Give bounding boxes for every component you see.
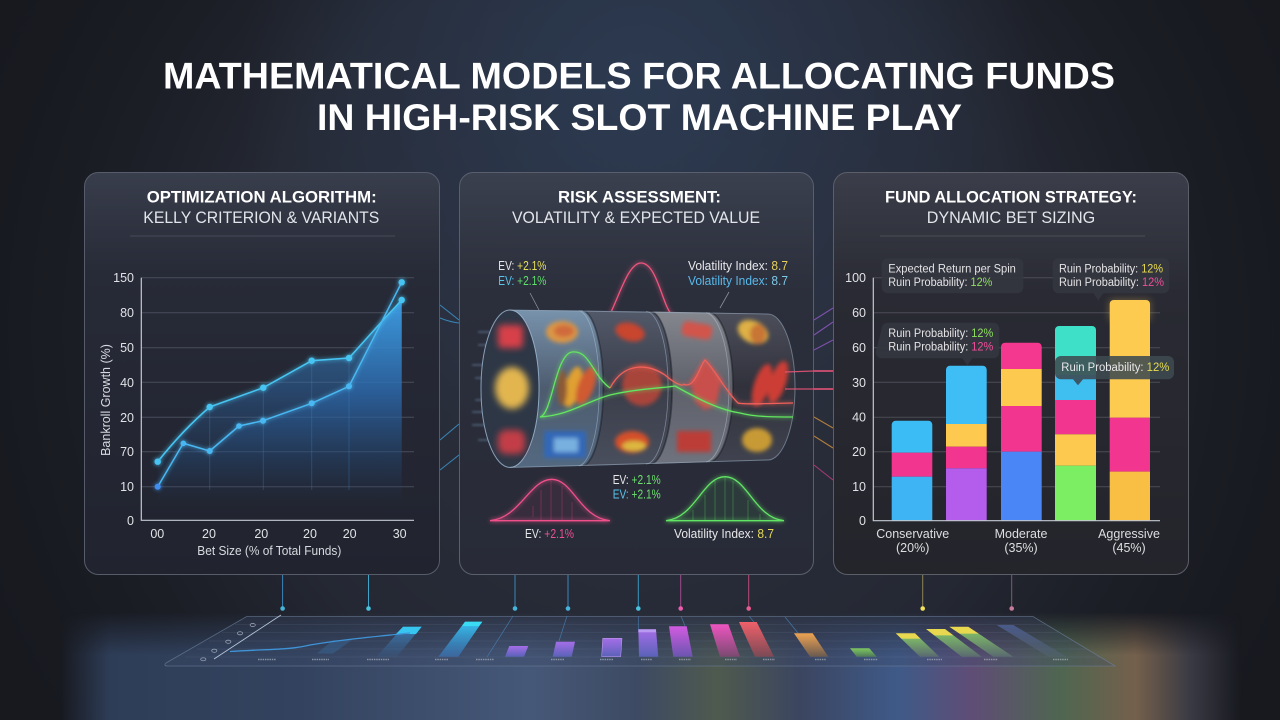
x axis labels: 20 — [254, 527, 268, 541]
axes — [141, 278, 414, 520]
stacked bar chart — [845, 258, 1174, 555]
glowing input stream — [459, 388, 505, 390]
y axis labels: 20 — [852, 445, 866, 459]
reel segment 4 — [710, 312, 795, 462]
y axis labels — [845, 271, 866, 528]
y axis labels: 100 — [845, 271, 866, 285]
line chart: bankroll growth — [99, 271, 414, 558]
connector glows between panels — [440, 305, 833, 480]
reel segment 2 — [583, 310, 672, 466]
bar: second — [946, 366, 987, 520]
y axis labels: 60 — [852, 306, 866, 320]
x axis labels: Moderate — [995, 527, 1047, 541]
x axis labels: 30 — [393, 527, 407, 541]
x axis labels: (20%) — [896, 541, 929, 555]
perspective floor chart — [165, 615, 1115, 666]
bar: aggressive — [1110, 300, 1150, 520]
callout: EV middle: EV: +2.1% — [613, 473, 661, 487]
x axis labels: Aggressive — [1098, 527, 1160, 541]
x axis labels — [876, 527, 1160, 555]
y axis labels — [113, 271, 134, 528]
panel 3 heading: DYNAMIC BET SIZING — [927, 208, 1095, 227]
reel symbols: blurred left column — [495, 325, 529, 454]
y axis labels: 50 — [120, 341, 134, 355]
tooltip: ruin probability over bars: Ruin Probability: 12% — [1061, 362, 1169, 374]
y axis labels: 0 — [859, 514, 866, 528]
x axis labels: 00 — [150, 527, 164, 541]
panel 3 card — [834, 172, 1188, 574]
x axis title: Bet Size (% of Total Funds) — [197, 544, 341, 558]
x axis labels: (35%) — [1004, 541, 1038, 555]
y axis labels: 150 — [113, 271, 134, 285]
x axis labels: 20 — [202, 527, 216, 541]
callout leader lines — [530, 292, 729, 310]
title — [163, 56, 1115, 138]
tooltip: ruin probability middle left: Ruin Probability: 12% — [888, 328, 993, 340]
x axis labels: Conservative — [876, 527, 949, 541]
slot machine reel cylinder — [459, 310, 814, 468]
callout: EV middle — [613, 473, 661, 502]
tooltip: ruin probability top right: Ruin Probability: 12% — [1059, 263, 1163, 275]
panel 2 heading: VOLATILITY & EXPECTED VALUE — [512, 208, 760, 227]
tooltip: ruin probability over bars — [1055, 356, 1174, 385]
bell curve: green distribution — [666, 477, 784, 521]
y axis labels: 80 — [120, 306, 134, 320]
reel segment 1 — [510, 310, 603, 468]
y axis labels: 10 — [852, 480, 866, 494]
label: volatility under green curve: Volatility Index: 8.7 — [674, 527, 774, 541]
panel 1 card — [84, 172, 440, 574]
x axis labels — [150, 527, 407, 541]
panel: risk assessment — [459, 172, 814, 574]
bell curve: pink distribution — [490, 479, 610, 521]
panel 1 heading: OPTIMIZATION ALGORITHM: — [147, 188, 377, 207]
callout: EV top left — [498, 259, 546, 288]
label: EV under pink curve: EV: +2.1% — [525, 527, 574, 541]
callout: volatility top right: Volatility Index: 8.7 — [688, 259, 788, 273]
bar: moderate — [1001, 343, 1042, 520]
floor bars — [317, 622, 1067, 657]
red curve over reel — [610, 360, 793, 404]
y axis labels: 60 — [852, 341, 866, 355]
shaded growth area — [158, 300, 402, 505]
top pink bell curve — [600, 263, 706, 344]
y axis labels: 40 — [852, 410, 866, 424]
reel symbols: remaining columns — [544, 315, 792, 458]
panel 3 heading: FUND ALLOCATION STRATEGY: — [885, 188, 1137, 207]
floor tick marks — [258, 658, 1068, 660]
tooltip: expected return: Ruin Probability: 12% — [888, 277, 992, 289]
y axis labels: 20 — [120, 411, 134, 425]
connectors from panels to floor chart — [280, 575, 1014, 611]
tooltip: ruin probability top right — [1053, 258, 1169, 300]
floor axis — [201, 615, 281, 661]
reel open face — [481, 310, 539, 467]
floor trend line — [230, 633, 410, 652]
title: IN HIGH-RISK SLOT MACHINE PLAY — [317, 97, 962, 138]
floor plate — [165, 616, 1115, 666]
reel segment 3 — [650, 312, 733, 464]
y axis labels: 0 — [127, 514, 134, 528]
bar: fourth — [1055, 326, 1096, 520]
callout: EV top left: EV: +2.1% — [498, 274, 546, 288]
panel 2 heading — [512, 188, 760, 227]
green curve over reel — [540, 352, 793, 417]
y axis labels: 30 — [852, 376, 866, 390]
tooltip: expected return: Expected Return per Spin — [888, 263, 1016, 275]
callout: EV top left: EV: +2.1% — [498, 259, 546, 273]
x axis labels: 20 — [303, 527, 317, 541]
motion streaks — [472, 332, 525, 440]
panel: optimization algorithm — [84, 172, 440, 574]
tooltip: ruin probability middle left — [876, 323, 999, 365]
y axis labels: 40 — [120, 376, 134, 390]
tooltip: expected return — [882, 258, 1023, 293]
tooltip: ruin probability top right: Ruin Probability: 12% — [1059, 277, 1164, 289]
floor leader lines — [487, 616, 798, 657]
x axis labels: (45%) — [1112, 541, 1146, 555]
lower growth line — [155, 279, 405, 490]
bar: conservative — [892, 421, 932, 520]
panel 2 heading: RISK ASSESSMENT: — [558, 188, 721, 207]
axes — [873, 278, 1160, 521]
callout: EV middle: EV: +2.1% — [613, 488, 661, 502]
callout: volatility top right — [688, 259, 788, 288]
floor glow — [68, 616, 1230, 720]
y axis title: Bankroll Growth (%) — [99, 344, 113, 456]
panel 3 heading — [885, 188, 1137, 227]
panel 2 card — [460, 172, 814, 574]
y axis labels: 70 — [120, 445, 134, 459]
y axis labels: 10 — [120, 480, 134, 494]
panel: fund allocation — [834, 172, 1188, 574]
callout: volatility top right: Volatility Index: 8.7 — [688, 274, 788, 288]
panel 1 heading — [143, 188, 379, 227]
panel 1 heading: KELLY CRITERION & VARIANTS — [143, 208, 379, 227]
title: MATHEMATICAL MODELS FOR ALLOCATING FUNDS — [163, 56, 1115, 96]
upper growth line — [154, 297, 405, 465]
x axis labels: 20 — [343, 527, 357, 541]
output streams — [785, 371, 814, 389]
tooltip: ruin probability middle left: Ruin Probability: 12% — [888, 342, 993, 354]
